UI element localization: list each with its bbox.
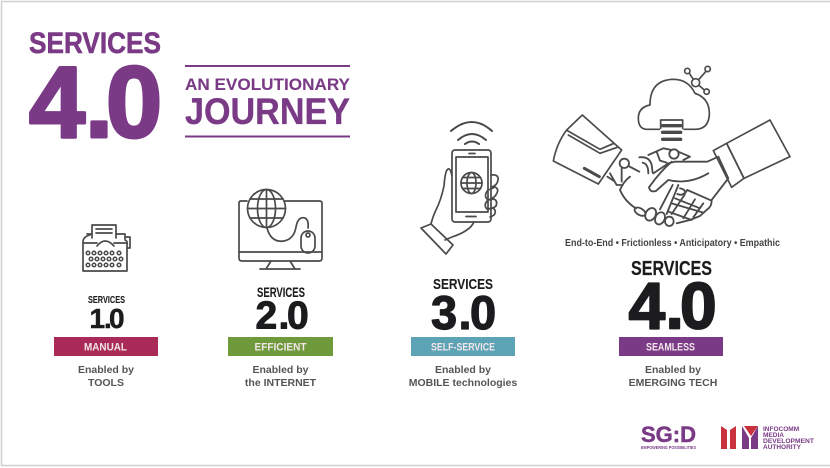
label bar: self-service: SELF-SERVICE [431,342,495,354]
subtitle: an evolutionary journey: JOURNEY [185,91,350,132]
label bar: efficient [228,337,333,356]
icon: robot and human handshake with cloud [553,66,790,226]
caption: tools: TOOLS [88,377,124,389]
icon: monitor with globe and mouse [239,190,322,269]
heading: services 3.0: SERVICES [433,276,493,293]
label bar: seamless [619,337,723,356]
cloud with server stack [638,66,710,139]
label bar: seamless: SEAMLESS [646,342,695,354]
logo: SG:D: EMPOWERING POSSIBILITIES [641,445,696,450]
heading: services 2.0: 2.0 [256,294,309,338]
subtitle: an evolutionary journey: AN EVOLUTIONARY [185,75,351,94]
heading: services 2.0: SERVICES [257,285,305,300]
icon: typewriter [83,225,130,271]
heading: services 4.0: 4.0 [628,268,717,342]
heading: services 4.0: SERVICES [631,257,712,280]
caption: emerging tech: Enabled by [645,364,701,376]
title: SERVICES [29,27,161,60]
heading: services 1.0: SERVICES [88,295,125,306]
caption: internet: Enabled by [252,364,309,376]
human sleeve [713,120,790,187]
logo: IMDA: AUTHORITY [763,444,802,451]
label bar: manual: MANUAL [84,342,127,354]
logo: SG:D: SG:D [641,422,696,447]
caption: tools [78,364,134,389]
caption: emerging tech: EMERGING TECH [629,377,717,389]
caption: mobile technologies [409,364,517,389]
caption: mobile technologies: Enabled by [435,364,491,376]
heading: services 1.0: 1.0 [90,303,125,334]
caption: internet: the INTERNET [245,377,317,389]
caption: tools: Enabled by [78,364,134,376]
heading: services 3.0: 3.0 [431,286,496,339]
title: 4.0 [29,47,162,159]
clasped hands [607,148,728,226]
tagline: End-to-End • Frictionless • Anticipatory • Empathic [565,238,780,249]
label bar: self-service [411,337,515,356]
robot sleeve [553,115,622,184]
caption: internet [245,364,317,389]
caption: emerging tech [629,364,717,389]
subtitle: an evolutionary journey [185,65,351,138]
icon: hand holding smartphone with wifi [421,122,498,254]
logo: IMDA: INFOCOMM [763,426,799,433]
logo: IMDA [721,426,814,451]
label bar: manual [54,337,158,356]
logo: IMDA: DEVELOPMENT [763,438,814,445]
label bar: efficient: EFFICIENT [254,342,307,354]
logo: IMDA: MEDIA [763,432,784,439]
caption: mobile technologies: MOBILE technologies [409,377,517,389]
